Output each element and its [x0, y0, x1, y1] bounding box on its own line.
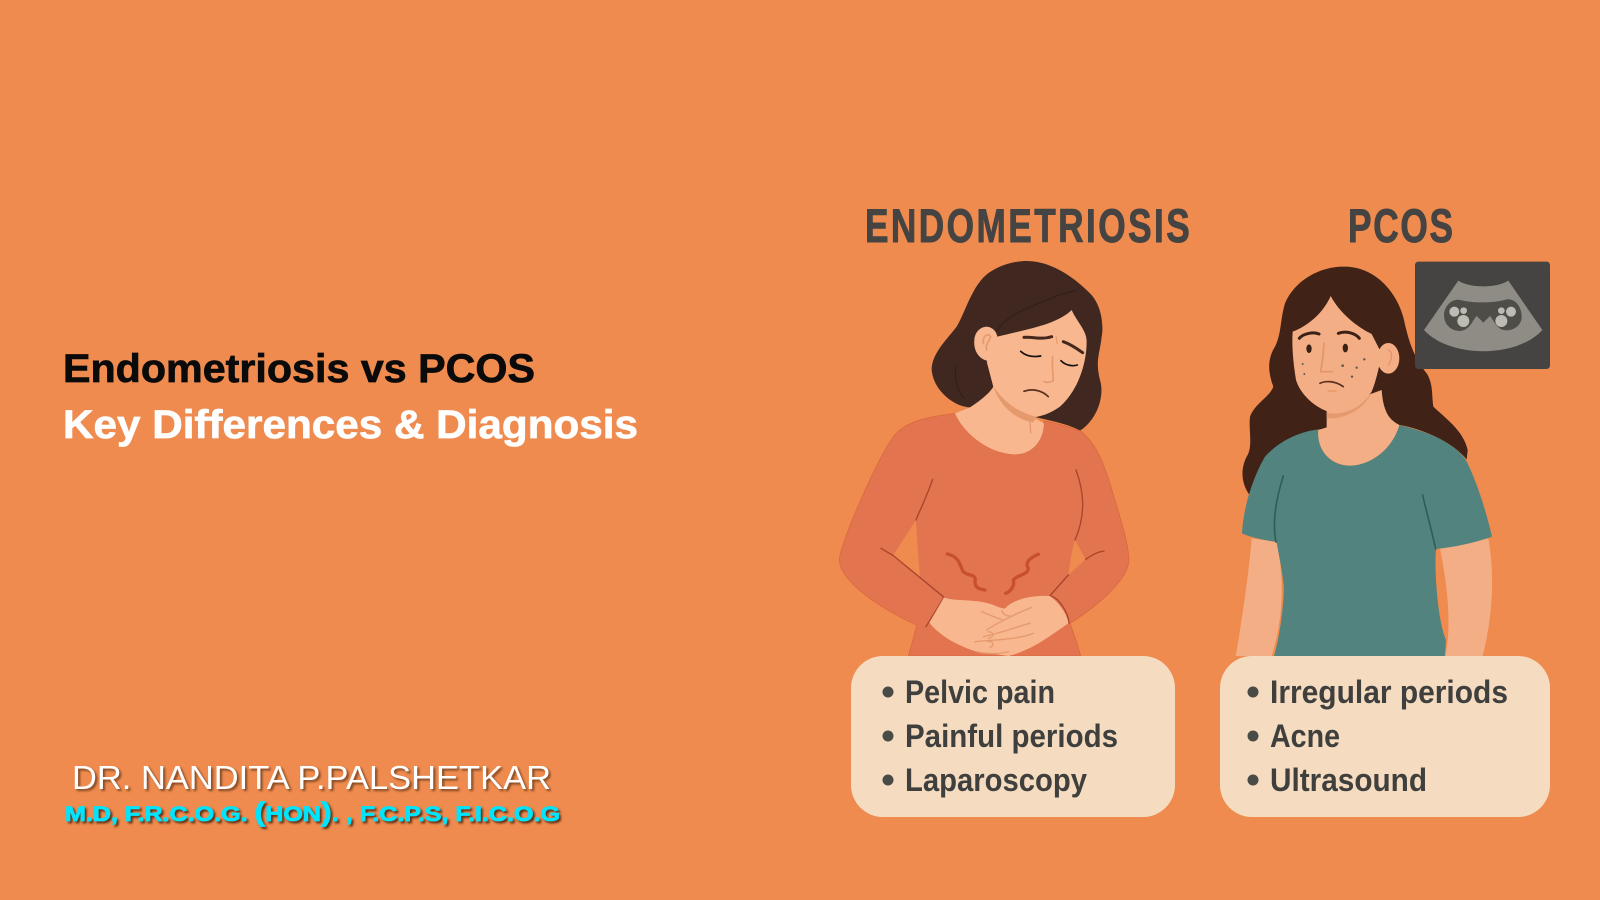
- illustration: woman with pelvic pain: [839, 261, 1129, 656]
- face: [987, 310, 1087, 417]
- bullet list: Irregular periods: [1270, 674, 1508, 710]
- ear: [974, 327, 997, 361]
- t-shirt: [1242, 425, 1492, 656]
- bullet list: Pelvic pain: [905, 674, 1055, 710]
- gaps between arms and torso: [893, 520, 1086, 577]
- bullet list: [1248, 674, 1508, 798]
- panel: PCOS symptoms: [1220, 656, 1550, 817]
- title line: Endometriosis vs PCOS: Endometriosis vs PCOS: [63, 347, 535, 391]
- sweater fold lines: [881, 470, 1104, 627]
- doctor credit: [65, 759, 560, 827]
- ear: [1377, 343, 1399, 374]
- ultrasound image panel: [1415, 262, 1550, 369]
- bullet list: Ultrasound: [1270, 762, 1427, 798]
- hair: [932, 261, 1102, 431]
- facial details: [1299, 332, 1391, 418]
- right arm: [1440, 538, 1492, 656]
- hair: [1242, 267, 1468, 494]
- bullet list: [882, 674, 1118, 798]
- heading: PCOS: PCOS: [1348, 199, 1453, 252]
- neck: [955, 362, 1044, 454]
- sweater: [839, 413, 1129, 656]
- acne freckles: [1302, 358, 1365, 378]
- bullet list: Painful periods: [905, 718, 1118, 754]
- left arm: [1236, 538, 1282, 656]
- pain squiggles: [947, 554, 1038, 593]
- clasped hands: [929, 596, 1068, 656]
- heading: ENDOMETRIOSIS: ENDOMETRIOSIS: [865, 199, 1190, 252]
- illustration: woman with acne: [1236, 262, 1550, 656]
- face: [1292, 296, 1381, 412]
- doctor name: DR. NANDITA P.PALSHETKAR: [72, 759, 551, 796]
- title block: [63, 347, 638, 447]
- doctor qualifications: M.D, F.R.C.O.G. (HON ). , F.C.P.S, F.I.C.O.G: [65, 797, 560, 827]
- panel: endometriosis symptoms: [851, 656, 1175, 817]
- facial details: [955, 290, 1083, 433]
- subtitle line: Key Differences & Diagnosis: Key Differences & Diagnosis: [63, 403, 638, 447]
- sleeve fold lines: [1274, 476, 1436, 549]
- neck: [1318, 390, 1399, 466]
- bullet list: Laparoscopy: [905, 762, 1087, 798]
- bullet list: Acne: [1270, 718, 1340, 754]
